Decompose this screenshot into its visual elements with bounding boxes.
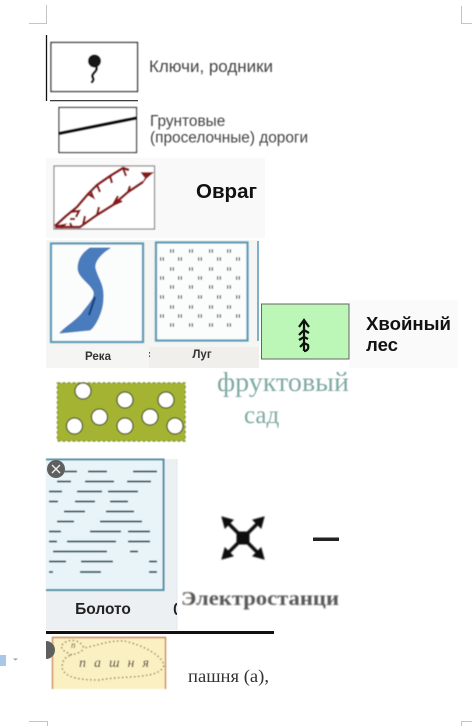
label: meadow: Луг — [192, 349, 212, 361]
icon: ravine symbol — [54, 166, 154, 229]
panel: dirt roads legend row — [59, 108, 308, 152]
icon: road symbol box — [59, 108, 136, 152]
label: coniferous forest: лес — [366, 334, 398, 355]
icon: close button — [47, 460, 65, 478]
label: ravine: Овраг — [196, 180, 257, 203]
icon: arable land symbol: пашня — [79, 656, 149, 671]
icon: close button partial — [46, 641, 55, 659]
panel: springs legend row — [46, 35, 273, 101]
icon: arable land symbol — [52, 637, 166, 689]
label: arable land: пашня (а), — [188, 666, 269, 687]
panel: arable land legend row — [46, 637, 269, 689]
label: swamp: Болото — [75, 601, 131, 618]
label: dirt roads: Грунтовые — [150, 113, 225, 130]
label: coniferous forest: Хвойный — [366, 313, 451, 334]
label: orchard: фруктовый — [217, 367, 349, 397]
label: springs: Ключи, родники — [149, 58, 273, 76]
panel: swamp — [46, 459, 177, 630]
icon: document fragment — [0, 655, 18, 666]
panel: coniferous forest legend row — [262, 300, 458, 368]
label: power station: Электростанци — [181, 588, 339, 610]
panel: ravine legend row — [46, 158, 265, 238]
icon: conifer symbol — [262, 304, 349, 359]
panel: river and meadow — [46, 240, 259, 368]
icon: meadow symbol — [156, 242, 248, 340]
icon: swamp symbol — [46, 459, 164, 590]
icon: orchard symbol — [58, 383, 185, 441]
label: orchard: сад — [244, 402, 279, 429]
icon: power station symbol — [222, 517, 264, 559]
dash — [313, 538, 339, 541]
icon: river symbol — [51, 244, 143, 342]
icon: spring symbol box — [51, 42, 138, 92]
label: dirt roads: (проселочные) дороги — [150, 130, 308, 146]
panel: orchard legend row — [58, 367, 349, 441]
panel: power station legend — [181, 517, 339, 610]
label: river: Река — [85, 351, 112, 363]
icon: arable land symbol: п — [71, 640, 76, 650]
